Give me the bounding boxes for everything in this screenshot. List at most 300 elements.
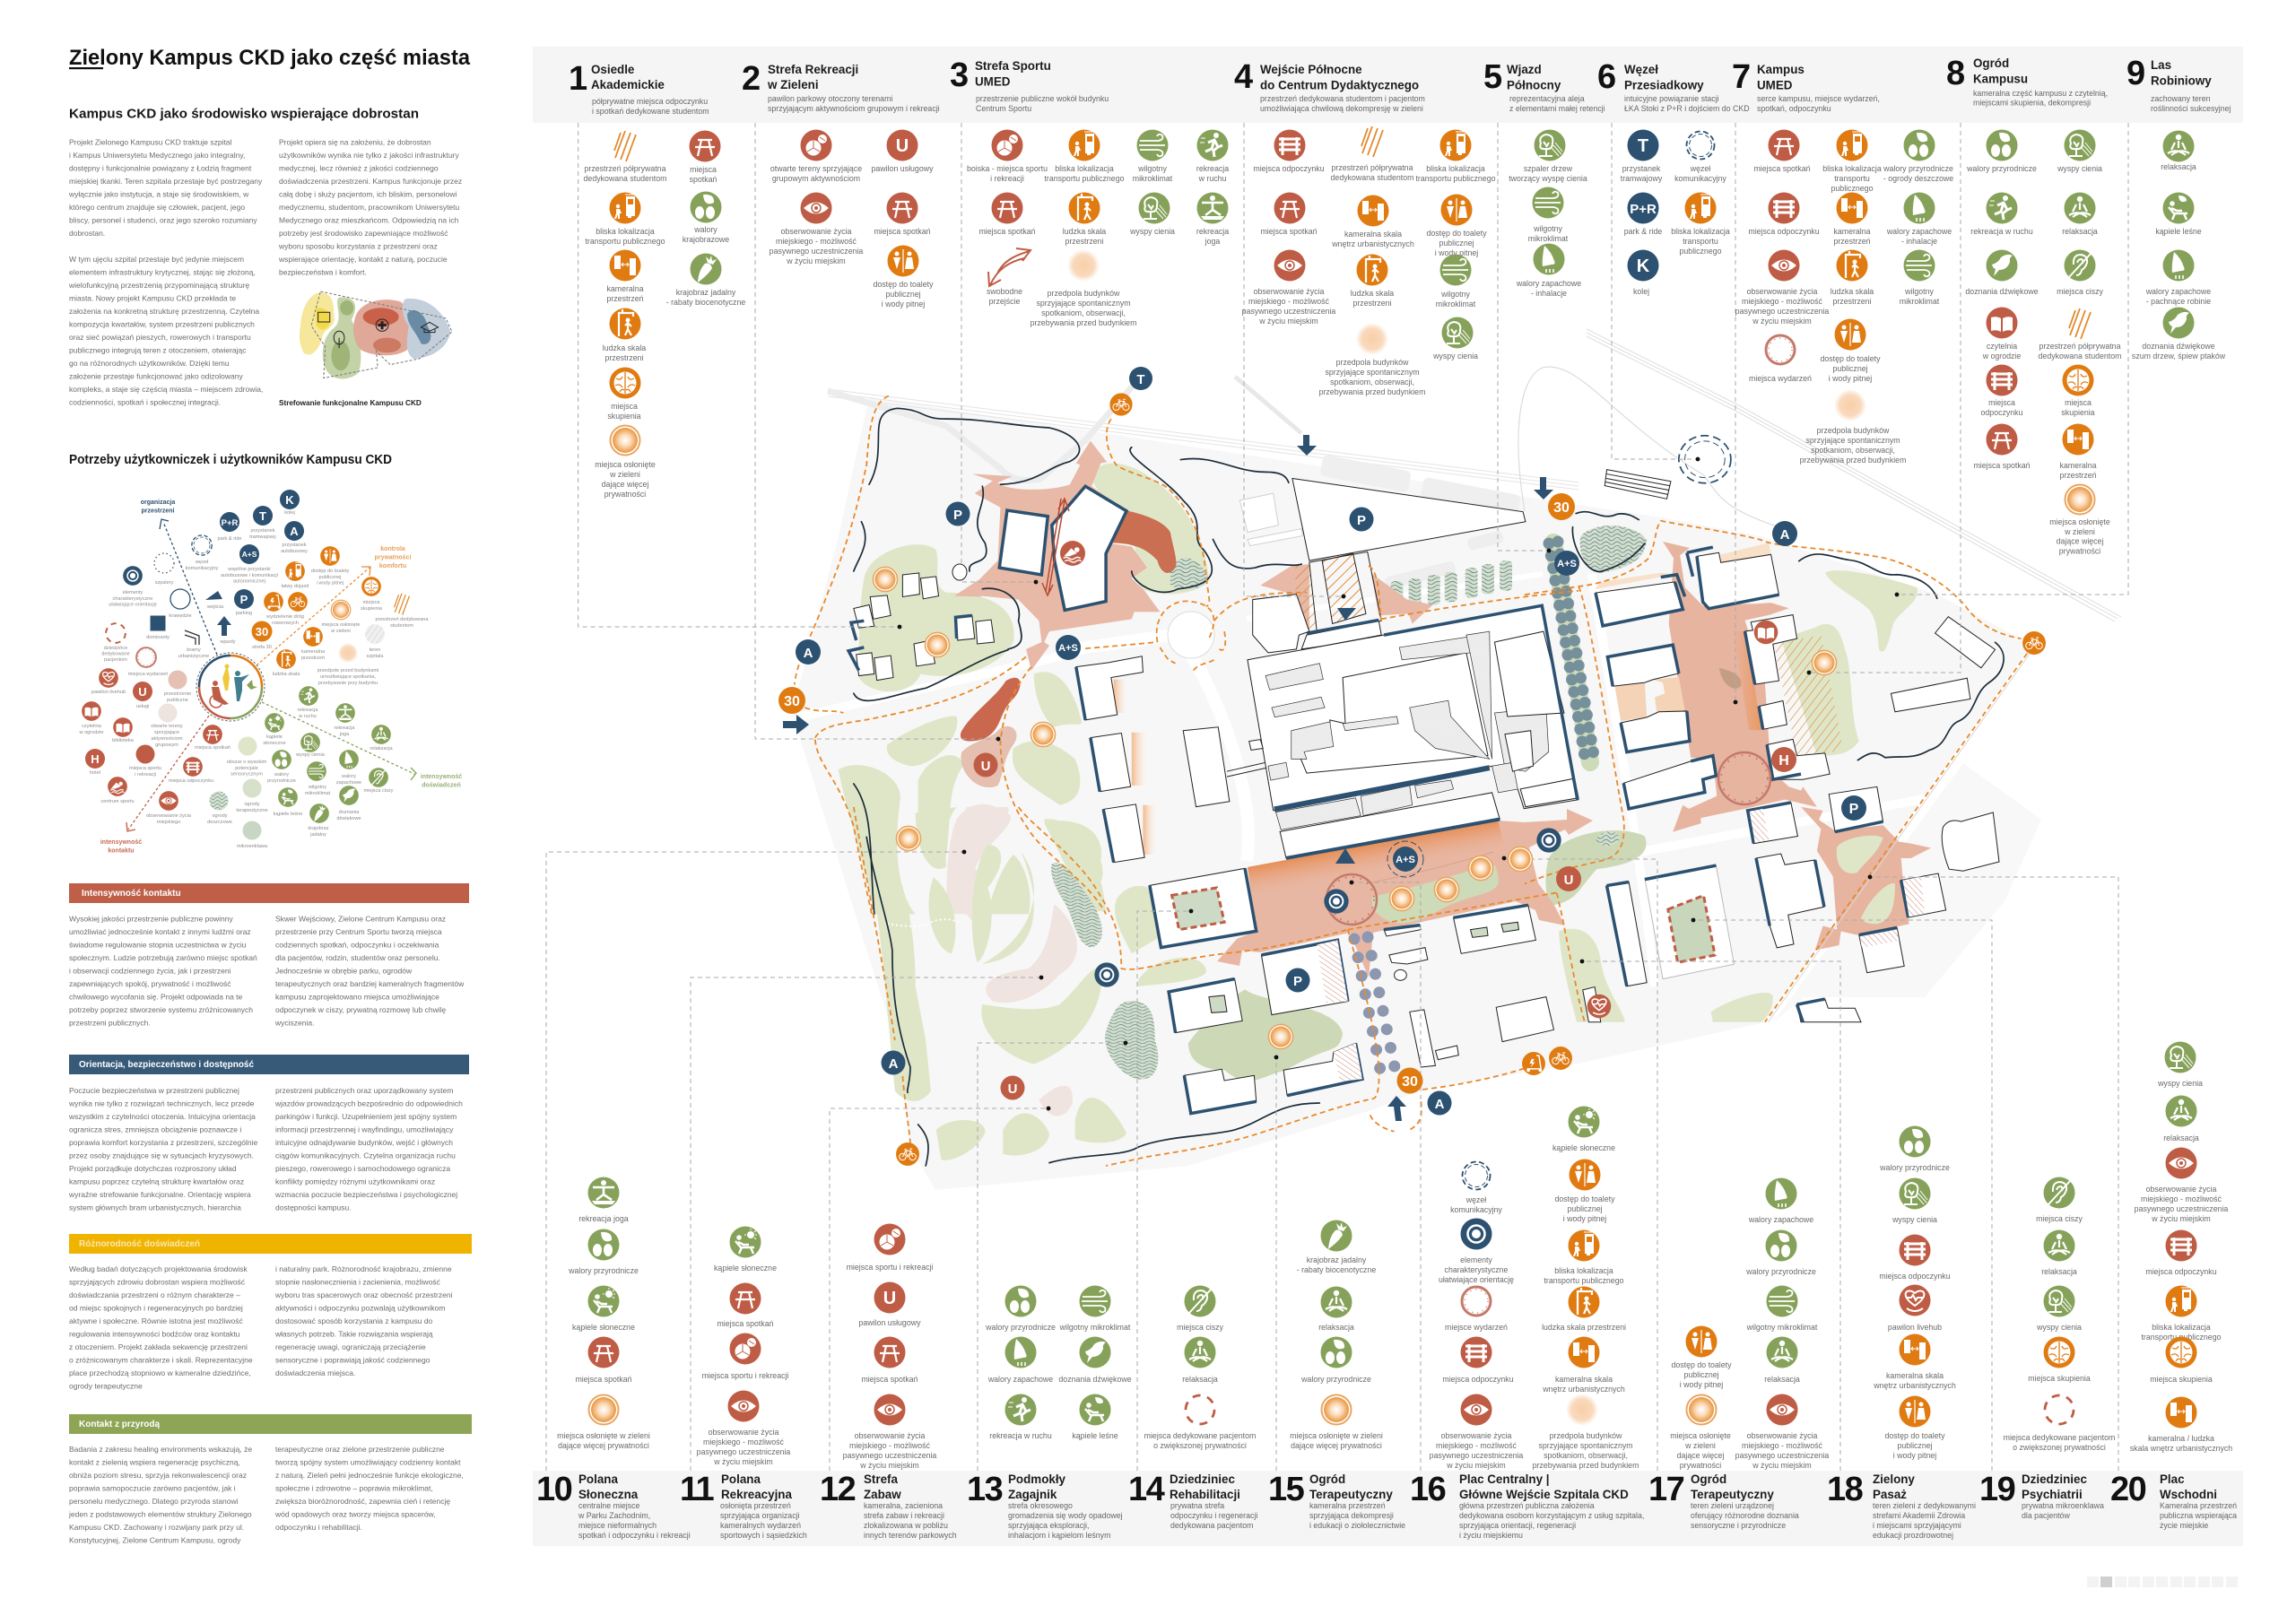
zone 20: publiczna wspierająca <box>2160 1511 2237 1520</box>
icon: mikroklimat <box>1133 129 1173 183</box>
item: relaksacja <box>370 725 393 751</box>
zone 9: 9 <box>2126 55 2144 92</box>
icon: dźwięki: doznania dźwiękowe <box>1965 287 2039 296</box>
icon: półprywatna <box>1331 126 1413 182</box>
item: A+S: wspólne przystanki <box>228 567 271 572</box>
zone 4: przestrzeń dedykowana studentom i pacjentom <box>1260 94 1425 103</box>
zone 15: kameralna przestrzeń <box>1309 1501 1386 1510</box>
icon: toalety: dostęp do toalety <box>1554 1194 1615 1203</box>
text block: przyroda left: kontakt z zielenią wspiera regenerację psychiczną, <box>69 1458 240 1467</box>
icon: walory: krajobrazowe <box>683 235 729 244</box>
zone 5 <box>1483 58 1605 113</box>
item: tramwaj <box>249 506 276 540</box>
icon: elementy: ułatwiające orientację <box>1439 1275 1514 1284</box>
zone 10: Polana <box>578 1472 618 1486</box>
zone 16: główna przestrzeń publiczna założenia <box>1459 1501 1595 1510</box>
zone 18: 18 <box>1827 1471 1863 1508</box>
text block: intro left: wielofunkcyjną przestrzenią przypominającą strukturę <box>68 281 250 290</box>
pin: shared stop <box>1554 551 1579 576</box>
zone 17: 17 <box>1648 1471 1684 1508</box>
item: ludzka skala <box>273 649 300 677</box>
icon: kameralna: przestrzeń <box>606 294 644 303</box>
text block: różnorodność right: doświadczenia miejsca. <box>275 1368 355 1377</box>
icon: transport: publicznego <box>1680 247 1722 256</box>
zone 12: Zabaw <box>864 1488 901 1501</box>
item: dojazd <box>282 561 309 589</box>
pin: speed 30 west: 30 <box>784 694 800 709</box>
icon: mikroklimat <box>1746 1286 1818 1332</box>
icon: obserwowanie: miejskiego - możliwość <box>1248 297 1330 306</box>
icon: spotkania <box>575 1336 632 1384</box>
icon: obserwowanie: w życiu miejskim <box>786 256 846 265</box>
pin: parking south: P <box>1293 974 1302 989</box>
zone 4: do Centrum Dydaktycznego <box>1260 79 1419 91</box>
icon: entrance triangle <box>1337 608 1356 621</box>
item: tramwaj: T <box>259 509 266 523</box>
zone 15: 15 <box>1268 1471 1305 1508</box>
text block: intro right: wyboru sposobu korzystania z przestrzeni oraz <box>278 242 438 251</box>
zone 14: odpoczynku i regeneracji <box>1170 1511 1257 1520</box>
text block: różnorodność left: od miejsc spokojnych i regeneracyjnych po bardziej <box>69 1304 243 1313</box>
icon: odpoczynek: miejsca odpoczynku <box>1442 1375 1514 1384</box>
zone 17: oferujący różnorodne doznania <box>1691 1511 1799 1520</box>
axis label: organizacja: przestrzeni <box>142 508 175 515</box>
icon: joga: joga <box>1205 237 1220 246</box>
icon: obserwowanie <box>2135 1148 2228 1223</box>
arrow: south entry <box>1387 1096 1406 1121</box>
icon list: zone 10 <box>557 1177 650 1450</box>
icon: transport: transportu publicznego <box>585 237 665 246</box>
icon: elementy <box>1439 1218 1514 1284</box>
item: bramy <box>178 630 209 659</box>
item: hotel: H <box>91 752 100 766</box>
item: toalety: i wody pitnej <box>317 581 344 586</box>
item: biblioteka <box>112 717 135 743</box>
item: krajobraz jadalny <box>308 804 329 838</box>
text block: intro left: założenie przestaje funkcjonować jako odizolowany <box>69 371 243 380</box>
item: autobus <box>281 521 308 554</box>
item: doznania: dźwiękowe <box>336 816 361 821</box>
item: A+S <box>221 544 278 585</box>
text block: orientacja left: system głównych bram urbanistycznych, hierarchia <box>69 1203 241 1212</box>
icon: kameralna skala: kameralna skala <box>1344 230 1402 239</box>
icon: przedpola: spotkaniom, obserwacji, <box>1330 378 1414 387</box>
icon: toalety: dostęp do toalety <box>1671 1360 1732 1369</box>
item: osłonięte <box>322 600 360 634</box>
zone 11: osłonięta przestrzeń <box>720 1501 791 1510</box>
icon: obserwowanie: pasywnego uczestniczenia <box>1735 307 1829 316</box>
zone 5: z elementami małej retencji <box>1509 104 1605 113</box>
item: dominanty <box>146 615 170 640</box>
icon: relaks <box>2163 1096 2199 1142</box>
text block: przyroda right: zwiększa bioróżnorodność, zapewnia cień i retencję <box>275 1497 450 1506</box>
icon: kameralna: kameralna <box>2059 461 2097 470</box>
caption: zoning: Strefowanie funkcjonalne Kampusu CKD <box>279 399 422 407</box>
icon: relaks <box>2161 131 2196 171</box>
pin: speed 30 west <box>778 687 805 714</box>
item: park ride <box>217 512 242 542</box>
pin: speed 30: 30 <box>1553 500 1570 516</box>
icon: relaks <box>1318 1286 1354 1332</box>
zone 4: Wejście Północne <box>1260 63 1362 76</box>
icon: tereny otwarte <box>770 129 862 183</box>
icon: transport: publicznego <box>1831 184 1874 193</box>
pin: services plaza: U <box>1564 873 1573 888</box>
item: tereny otwarte <box>151 703 183 748</box>
text block: intro left: miejskiej tkanki. Teren szpitala przestaje być postrzegany <box>69 177 263 186</box>
zone 11: kameralnych wydarzeń <box>720 1521 801 1530</box>
icon: mikroklimat: wilgotny <box>1534 224 1562 233</box>
zone 12: kameralna, zacieniona <box>864 1501 943 1510</box>
icon: toalety: publicznej <box>1897 1441 1933 1450</box>
text block: kontakt left: chwilowego wycofania się. Projekt odpowiada na te <box>69 992 243 1001</box>
icon: ludzka skala: przestrzeni <box>604 353 644 362</box>
title: Zielony Kampus CKD jako część miasta <box>69 46 470 70</box>
item: ogrody terapeutyczne: ogrody <box>244 802 260 807</box>
item: spotkania <box>195 725 230 751</box>
zone 1: 1 <box>569 60 587 98</box>
pin: parking: P <box>953 508 962 523</box>
item: parking: P <box>240 593 248 606</box>
icon: spotkania: miejsca spotkań <box>575 1375 632 1384</box>
text block: intro left: codzienności, spotkań i społecznej integracji. <box>69 398 221 407</box>
icon: spotkania: miejsca spotkań <box>861 1375 918 1384</box>
text block: intro left: go na różnorodnych użytkowników. Dzięki temu <box>69 359 230 368</box>
icon: kolej <box>1627 249 1659 296</box>
pagination <box>2087 1577 2238 1587</box>
icon: kameralna skala: wnętrz urbanistycznych <box>1331 239 1414 248</box>
icon: osłonięte: dające więcej <box>602 480 648 489</box>
item: relaksacja: relaksacja <box>370 746 393 751</box>
item: elementy: ułatwiające orientację <box>109 603 157 608</box>
icon: elementy: elementy <box>1460 1255 1492 1264</box>
icon: czytelnia <box>1982 307 2021 360</box>
icon: cień: wyspy cienia <box>2057 164 2102 173</box>
icon: kameralna: kameralna / ludzka <box>2148 1434 2214 1443</box>
zone 12: 12 <box>820 1471 856 1508</box>
text block: orientacja right: intuicyjne odnajdywanie budynków, wejść i głównych <box>275 1138 453 1147</box>
icon: toalety: i wody pitnej <box>1680 1380 1723 1389</box>
heading: potrzeby: Potrzeby użytkowniczek i użytkowników Kampusu CKD <box>69 453 392 467</box>
pin: tram stop: T <box>1136 372 1145 387</box>
icon: cień <box>2036 1286 2082 1332</box>
item: wejścia <box>205 591 224 610</box>
icon: cień: wyspy cienia <box>1892 1215 1937 1224</box>
icon: przestrzeń półprywatna: przestrzeń półprywatna <box>585 164 665 173</box>
text block: różnorodność left: z otoczeniem. Projekt zakłada sekwencję przestrzeni <box>69 1342 248 1351</box>
pin: library <box>1754 621 1778 644</box>
text block: kontakt left: Wysokiej jakości przestrzenie publiczne powinny <box>69 915 234 924</box>
icon: przedpola: sprzyjające spontanicznym <box>1036 299 1131 308</box>
item: ogrody deszczowe: ogrody <box>212 813 228 819</box>
icon: toalety <box>873 246 934 308</box>
icon: zapach <box>1748 1178 1813 1224</box>
map: public plazas <box>954 441 1931 977</box>
icon: obserwowanie <box>1735 249 1829 326</box>
item: elementy: charakterystyczne <box>112 596 153 602</box>
item: dojazd: łatwy dojazd <box>282 584 309 589</box>
pin: landmarks <box>1094 828 1561 987</box>
icon: przestrzeń półprywatna <box>584 131 666 183</box>
item: węzeł <box>186 535 219 571</box>
icon: dedykowane: o zwiększonej prywatności <box>2013 1443 2106 1452</box>
icon: osłonięte: dające więcej <box>1677 1451 1724 1460</box>
icon list: zone 16 <box>1430 1107 1639 1470</box>
pin: speed 30 south <box>1397 1067 1422 1094</box>
zone 9: zachowany teren <box>2151 94 2211 103</box>
icon: relaks: relaksacja <box>1182 1375 1218 1384</box>
item: rekreacja w ruchu: w ruchu <box>298 714 317 719</box>
icon: obserwowanie: pasywnego uczestniczenia <box>1242 307 1335 316</box>
pin: bike south <box>896 1142 919 1166</box>
icon: węzeł: węzeł <box>1691 164 1710 173</box>
text block: kontakt right: codziennych spotkań, odpoczynku i oczekiwania <box>275 940 439 949</box>
icon: pawilon: pawilon usługowy <box>859 1318 921 1327</box>
pin: bike <box>1109 393 1133 416</box>
icon: przedpola: sprzyjające spontanicznym <box>1805 436 1900 445</box>
icon: osłonięte: dające więcej prywatności <box>1291 1441 1382 1450</box>
item: krawędzie: krawędzie <box>169 613 192 619</box>
bar: Kontakt z przyrodą <box>69 1414 472 1434</box>
item: usługi <box>133 682 152 709</box>
icon: transport: transportu publicznego <box>1415 174 1496 183</box>
icon: zapach <box>2145 249 2211 306</box>
icon list: zone 17 <box>1670 1178 1829 1470</box>
icon: skupienie: miejsca <box>2065 398 2092 407</box>
text block: intro left: którego centrum znajduje się człowiek, pacjent, jego <box>69 203 245 212</box>
zone 8: kameralna część kampusu z czytelnią, <box>1973 89 2108 98</box>
zone 3: Strefa Sportu <box>975 59 1051 73</box>
icon: obserwowanie: w życiu miejskim <box>859 1461 919 1470</box>
icon: skupienie <box>2061 364 2095 417</box>
icon: toalety: i wody pitnej <box>1893 1451 1936 1460</box>
zone 20: 20 <box>2110 1471 2146 1508</box>
item: strefa 30 <box>251 621 273 650</box>
zone 16: Plac Centralny | <box>1459 1472 1550 1486</box>
text block: przyroda right: społeczne i zdrowotne – poprawia mikroklimat, <box>275 1483 433 1492</box>
icon: obserwowanie: obserwowanie życia <box>1747 1431 1817 1440</box>
text block: orientacja left: wszystkim z czytelności otoczenia. Intuicyjna orientacja <box>68 1112 256 1121</box>
zone 20 <box>2110 1471 2237 1530</box>
icon: mikroklimat: wilgotny mikroklimat <box>1059 1323 1131 1332</box>
item: A+S: A+S <box>242 550 257 559</box>
map: buildings <box>848 479 1999 1114</box>
pin: shared stop 2: A+S <box>1058 643 1078 654</box>
text block: przyroda left: poprawia samopoczucie zarówno pacjentów, jak i <box>69 1483 236 1492</box>
text block: kontakt left: przestrzeni publicznych. <box>69 1019 151 1028</box>
icon: osłonięte <box>557 1395 650 1450</box>
icon: kameralna <box>2130 1397 2232 1453</box>
item: odpoczynek: miejsca odpoczynku <box>169 778 213 784</box>
icon: półprywatna: dedykowana studentom <box>1331 173 1413 182</box>
pin: shared stop: A+S <box>1557 559 1577 569</box>
item: walory przyrodnicze: walory <box>274 772 289 777</box>
icon: mikroklimat <box>1059 1286 1131 1332</box>
icon: transport: transportu publicznego <box>1044 174 1125 183</box>
zone 10: miejsce nieformalnych <box>578 1521 657 1530</box>
icon: transport: bliska lokalizacja <box>1671 227 1730 236</box>
item: osłonięte: w zieleni <box>330 629 351 634</box>
icon: spotkania <box>717 1282 774 1328</box>
icon: toalety: publicznej <box>1683 1370 1719 1379</box>
icon: toalety: publicznej <box>1567 1204 1603 1213</box>
item: joga <box>334 703 355 737</box>
icon: kameralna: wnętrz urbanistycznych <box>1542 1385 1625 1394</box>
icon: odpoczynek <box>2145 1230 2217 1276</box>
icon: osłonięte: miejsca osłonięte w zieleni <box>557 1431 650 1440</box>
icon: transport <box>1544 1230 1624 1285</box>
icon: zapach <box>987 1336 1053 1384</box>
item: wydarzenia <box>128 647 168 677</box>
item: przestrzenie publiczne: publiczne <box>167 698 188 703</box>
icon: kolej: K <box>1637 256 1650 276</box>
text block: orientacja right: parkingów i funkcji. Uzupełnieniem jest spójny system <box>275 1112 457 1121</box>
item: strefa 30: 30 <box>256 625 268 638</box>
text block: orientacja left: poprawia komfort korzystania z przestrzeni, szczególnie <box>69 1138 257 1147</box>
item: teren szpitala: teren <box>370 647 380 653</box>
icon list: zone 8 <box>1965 129 2121 555</box>
item: autobus: przystanek <box>282 543 307 548</box>
text block: intro left: Projekt Zielonego Kampusu CKD traktuje szpital <box>69 138 232 147</box>
icon: tereny otwarte: otwarte tereny sprzyjające <box>770 164 862 173</box>
zone 7: UMED <box>1757 79 1793 91</box>
text block: przyroda right: wód opadowych oraz tworzy miejsca spacerów, <box>274 1510 436 1519</box>
map: pedestrian and cycle routes <box>795 395 2030 1166</box>
text block: kontakt right: terapeutycznych oraz bardziej kameralnych fragmentów <box>275 979 465 988</box>
zone 20: Plac <box>2160 1472 2185 1486</box>
icon: szpaler <box>1509 129 1587 183</box>
icon: toalety <box>1554 1159 1615 1223</box>
zone 6: Węzeł <box>1624 63 1658 76</box>
icon: obserwowanie: obserwowanie życia <box>709 1428 778 1437</box>
zone 14 <box>1128 1471 1257 1530</box>
text block: intro left: oraz sieć powiązań pieszych, rowerowych i transportu <box>69 333 251 342</box>
zone 9: roślinności sukcesyjnej <box>2151 104 2231 113</box>
icon: ruch: w ruchu <box>1198 174 1227 183</box>
icon: przedpola <box>1533 1394 1639 1470</box>
icon: ludzka skala: ludzka skala <box>1063 227 1106 236</box>
icon: transport: bliska lokalizacja <box>1822 164 1882 173</box>
map: site plan <box>792 329 2121 1190</box>
pin: parking north <box>1349 508 1374 531</box>
icon: odpoczynek <box>1253 129 1325 173</box>
item: wydarzenia: miejsca wydarzeń <box>128 672 168 677</box>
item: walory przyrodnicze: przyrodnicze <box>267 778 296 784</box>
icon: osłonięte: prywatności <box>604 490 646 499</box>
leader lines <box>546 123 2128 1471</box>
zone 8: Kampusu <box>1973 72 2028 86</box>
zone 17 <box>1648 1471 1799 1530</box>
item: toalety <box>311 546 350 586</box>
item: toalety: publicznej <box>319 575 341 580</box>
icon list: zone 18 <box>1873 1126 1956 1460</box>
icon: słońce: kąpiele słoneczne <box>714 1264 777 1273</box>
zone 4: 4 <box>1234 58 1253 96</box>
icon: obserwowanie: obserwowanie życia <box>855 1431 925 1440</box>
zone 2: pawilon parkowy otoczony terenami <box>768 94 892 103</box>
pin: bus <box>796 639 821 665</box>
icon: mikroklimat <box>1528 187 1569 243</box>
item: walory zapachowe: zapachowe <box>336 780 361 786</box>
icon: kameralna: kameralna <box>606 284 644 293</box>
text block: intro right: użytkowników wynika nie tylko z jakości infrastruktury <box>279 151 460 160</box>
item: obszar sensoryczny: obszar o wysokim <box>227 760 266 765</box>
zone 6: ŁKA Stoki z P+R i dojściem do CKD <box>1624 104 1750 113</box>
icon: przedpola: przedpola budynków <box>1817 426 1889 435</box>
zone 12: innych terenów parkowych <box>864 1531 957 1540</box>
icon: przedpola: przedpola budynków <box>1048 289 1119 298</box>
pin: krawędź <box>952 564 967 580</box>
text block: różnorodność left: doświadczania przestrzeni o różnym charakterze – <box>69 1290 240 1299</box>
item: usługi: U <box>138 685 147 699</box>
zone 16: 16 <box>1410 1471 1446 1508</box>
icon: toalety <box>1426 194 1487 257</box>
item: przestrzenie publiczne <box>164 671 191 703</box>
icon: skupienie: miejsca skupienia <box>2150 1375 2213 1384</box>
zone 1: i spotkań dedykowane studentom <box>592 107 709 116</box>
map pins <box>778 367 2046 1166</box>
icon: ruch <box>1196 129 1229 183</box>
icon: odpoczynek <box>1442 1336 1514 1384</box>
icon: relaks: relaksacja <box>1318 1323 1354 1332</box>
icon: zapach: walory zapachowe <box>987 1375 1053 1384</box>
zone 2: Strefa Rekreacji <box>768 63 858 76</box>
icon: cisza <box>1177 1286 1224 1332</box>
icon: wydarzenia: miejsca wydarzeń <box>1749 374 1812 383</box>
text block: różnorodność left: sprzyjających zdrowiu dobrostan wspiera możliwość <box>69 1277 246 1286</box>
icon: skupienie <box>2028 1336 2091 1383</box>
item: drogi rowerowe: wydzielenie dróg <box>266 614 304 620</box>
zone 15: i edukacji o ziołolecznictwie <box>1309 1521 1405 1530</box>
icon: transport: bliska lokalizacja <box>2152 1323 2211 1332</box>
icon: odpoczynek: miejsca odpoczynku <box>1879 1272 1951 1281</box>
text block: kontakt left: potrzeby poprzez stworzenie systemu zróżnicowanych <box>69 1005 253 1014</box>
item: tereny otwarte: aktywnościom <box>151 736 183 742</box>
item: czytelnia <box>78 701 104 735</box>
icon: tramwaj: T <box>1638 136 1648 156</box>
icon: pawilon: U <box>896 136 909 156</box>
zone 10: spotkań i odpoczynku i rekreacji <box>578 1531 691 1540</box>
icon: tereny otwarte: grupowym aktywnościom <box>772 174 860 183</box>
text block: intro left: publicznego integrują teren z otoczeniem, otwierając <box>69 346 247 355</box>
icon: kąpiele leśne <box>1072 1394 1118 1440</box>
icon: odpoczynek: miejsca odpoczynku <box>2145 1267 2217 1276</box>
icon: dedykowane: o zwiększonej prywatności <box>1153 1441 1247 1450</box>
zone 15: sprzyjająca dekompresji <box>1309 1511 1394 1520</box>
item: kameralna: kameralna <box>301 649 325 655</box>
text block: orientacja left: ogranicza stres, zmniejsza obciążenie poznawcze i <box>69 1125 241 1134</box>
text block: kontakt left: i obserwacji codziennego życia, jak i przestrzeni <box>69 967 231 976</box>
icon: krajobraz jadalny: - rabaty biocenotyczne <box>1297 1265 1376 1274</box>
icon list: zone 15 <box>1290 1220 1383 1450</box>
icon list: zone 19 <box>2004 1177 2115 1452</box>
heading: dobrostan: Kampus CKD jako środowisko wspierające dobrostan <box>69 108 419 122</box>
zone 1: półprywatne miejsca odpoczynku <box>592 97 708 106</box>
zone 16 <box>1410 1471 1644 1540</box>
icon: osłonięte: miejsca osłonięte <box>595 460 656 469</box>
item: rekreacja w ruchu <box>297 686 318 719</box>
icon: walory <box>1883 129 1953 183</box>
icon list: zone 13 <box>985 1286 1132 1440</box>
icon: odpoczynek <box>1981 364 2023 417</box>
zone 13: 13 <box>967 1471 1003 1508</box>
icon list: zone 11 <box>697 1227 790 1466</box>
zone 11: Rekreacyjna <box>721 1488 792 1501</box>
icon: obserwowanie: obserwowanie życia <box>2146 1185 2216 1194</box>
item: bramy: bramy <box>187 647 201 653</box>
item: obszar sensoryczny: potencjale <box>235 766 258 771</box>
icon: półprywatna: dedykowana studentom <box>2039 352 2121 360</box>
